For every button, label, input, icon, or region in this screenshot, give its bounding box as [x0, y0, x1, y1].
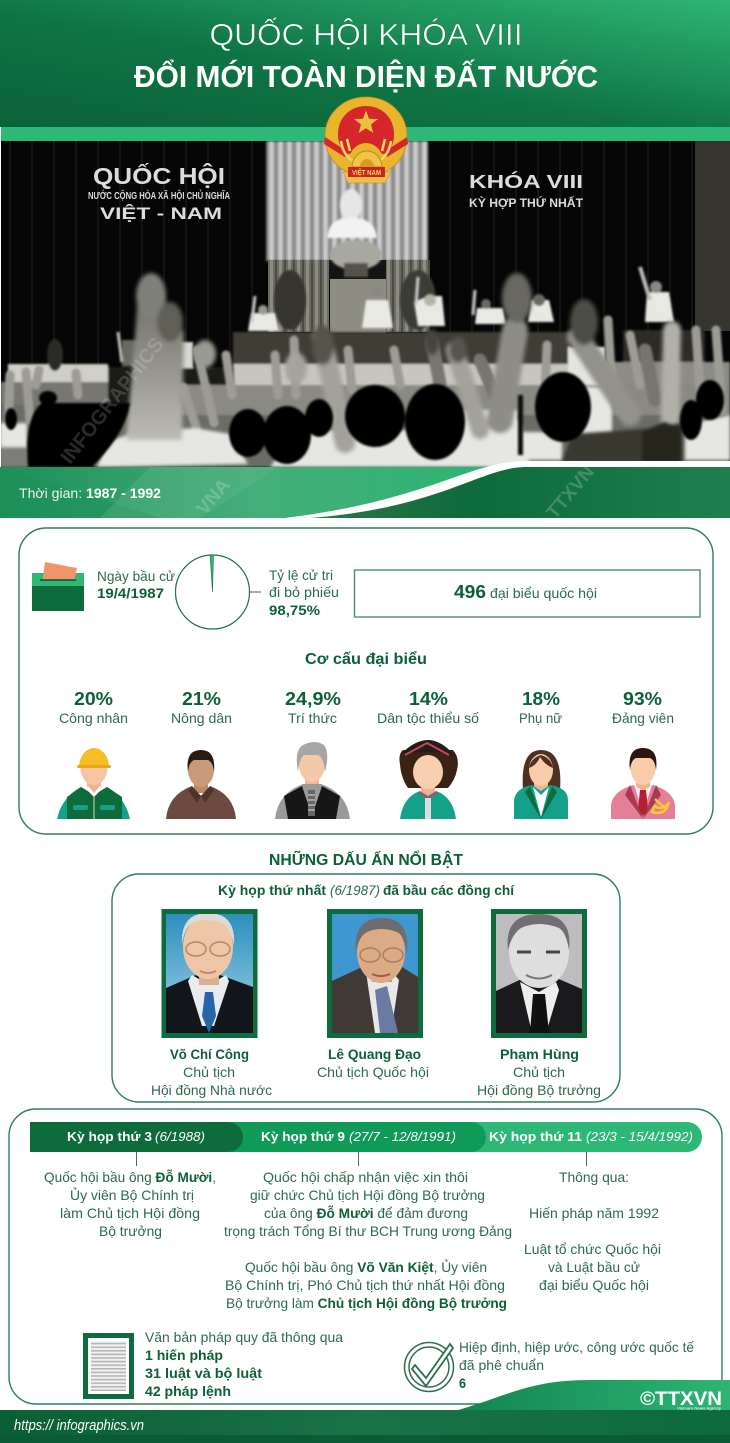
logo: TTXVN: ©TTXVN	[640, 1389, 722, 1410]
title	[134, 16, 598, 94]
stat: women	[519, 689, 562, 726]
panel: later sessions	[9, 1109, 722, 1404]
turnout text: 98,75%	[269, 602, 321, 618]
stat: women: Phụ nữ	[519, 710, 562, 726]
icon: ethnic minority woman	[399, 740, 458, 819]
election date: 19/4/1987	[97, 585, 164, 601]
title: ĐỔI MỚI TOÀN DIỆN ĐẤT NƯỚC	[134, 58, 598, 94]
delegates count box: 496	[454, 582, 486, 602]
stat: ethnic minorities: Dân tộc thiểu số	[377, 710, 479, 726]
bust and flowers	[274, 189, 436, 330]
icon: woman	[514, 750, 568, 819]
icon: intellectual	[275, 742, 350, 819]
session 3 label: Kỳ họp thứ 3	[67, 1129, 152, 1144]
emblem red field	[338, 106, 394, 154]
raised hands	[8, 320, 722, 430]
text: legal documents: 42 pháp lệnh	[145, 1383, 231, 1399]
session 3 label: (6/1988)	[155, 1129, 205, 1144]
header banner	[0, 0, 730, 141]
official: Le Quang Dao	[317, 1046, 429, 1080]
icon: worker	[57, 748, 130, 819]
session 11 label: (23/3 - 15/4/1992)	[586, 1129, 693, 1144]
emblem star	[354, 110, 378, 133]
time banner	[0, 461, 730, 523]
wall sign left: VIỆT - NAM	[100, 204, 222, 223]
delegates count box: đại biểu quốc hội	[490, 585, 597, 601]
portrait: Vo Chi Cong	[162, 909, 258, 1038]
emblem side ribbons	[324, 137, 408, 157]
text: session 9: Quốc hội bầu ông Võ Văn Kiệt, Ủy viên	[245, 1258, 487, 1275]
text: treaties: Hiệp định, hiệp ước, công ước quốc tế	[459, 1339, 694, 1355]
official: Pham Hung	[477, 1046, 601, 1098]
stat: party members	[612, 689, 674, 726]
portrait: Pham Hung	[491, 909, 587, 1038]
national emblem	[324, 97, 408, 183]
wall sign left	[88, 162, 230, 223]
stat: intellectuals	[285, 689, 341, 726]
text: session 3: Bộ trưởng	[99, 1223, 162, 1239]
stat: intellectuals: 24,9%	[285, 689, 341, 709]
text: session 3	[44, 1169, 216, 1239]
banner watermark: VNA	[193, 475, 235, 519]
session 9 label: (27/7 - 12/8/1991)	[349, 1129, 456, 1144]
title: QUỐC HỘI KHÓA VIII	[210, 16, 522, 52]
text: session 9: Quốc hội chấp nhận việc xin thôi	[263, 1169, 468, 1185]
session 11 label	[489, 1129, 693, 1144]
text: treaties: đã phê chuẩn	[459, 1357, 544, 1373]
turnout text: Tỷ lệ cử tri	[269, 567, 333, 583]
stat: party members: 93%	[623, 689, 662, 709]
wall sign right: KHÓA VIII	[469, 171, 583, 192]
official: Le Quang Dao: Chủ tịch Quốc hội	[317, 1064, 429, 1080]
official: Pham Hung: Chủ tịch	[513, 1064, 565, 1080]
icon: legal document	[83, 1333, 134, 1399]
heading: delegate structure: Cơ cấu đại biểu	[305, 650, 427, 668]
text: session 9: trọng trách Tổng Bí thư BCH Trung ương Đảng	[224, 1223, 512, 1239]
official: Vo Chi Cong	[151, 1046, 272, 1098]
time text: Thời gian: 1987 - 1992	[19, 485, 161, 501]
turnout text	[269, 567, 339, 618]
dark sleeves	[562, 422, 682, 463]
text: session 11: Hiến pháp năm 1992	[529, 1205, 659, 1221]
emblem gold body	[325, 97, 407, 172]
stat: farmers: 21%	[182, 689, 221, 709]
text: session 11: đại biểu Quốc hội	[539, 1277, 649, 1293]
wall sign left: NƯỚC CỘNG HÒA XÃ HỘI CHỦ NGHĨA	[88, 189, 230, 202]
footer	[0, 1380, 730, 1443]
icon: ballot box	[32, 562, 84, 611]
session 11 label: Kỳ họp thứ 11	[489, 1129, 582, 1144]
presidium table and floor	[0, 330, 730, 467]
text: session 3: làm Chủ tịch Hội đồng	[60, 1205, 200, 1221]
session heading: (6/1987)	[330, 882, 380, 898]
text: treaties: 6	[459, 1375, 466, 1391]
text: legal documents: 1 hiến pháp	[145, 1347, 223, 1363]
text: session 11: Luật tổ chức Quốc hội	[524, 1241, 661, 1257]
text: legal documents: Văn bản pháp quy đã thông qua	[145, 1329, 343, 1345]
text: session 3: Ủy viên Bộ Chính trị	[70, 1186, 194, 1203]
icon: party member	[611, 748, 675, 819]
photo: national assembly voting	[0, 141, 730, 468]
turnout text: đi bỏ phiếu	[269, 584, 339, 600]
text: session 11	[524, 1169, 661, 1293]
session 3 label	[67, 1129, 205, 1144]
portrait: Le Quang Dao	[327, 909, 423, 1038]
session heading: đã bầu các đồng chí	[383, 882, 515, 898]
stat: women: 18%	[522, 689, 560, 709]
session heading: Kỳ họp thứ nhất	[218, 882, 326, 898]
stage delegates	[118, 267, 674, 362]
official: Vo Chi Cong: Võ Chí Công	[170, 1046, 249, 1062]
session 9 label	[261, 1129, 456, 1144]
election date	[97, 568, 175, 601]
official: Le Quang Dao: Lê Quang Đạo	[328, 1046, 421, 1062]
shirts	[0, 387, 730, 467]
text: treaties	[459, 1339, 694, 1391]
emblem wheat	[341, 139, 391, 161]
session heading	[218, 882, 515, 898]
heading: highlights: NHỮNG DẤU ẤN NỔI BẬT	[269, 849, 463, 869]
icon: farmer	[166, 750, 236, 819]
session 9 label: Kỳ họp thứ 9	[261, 1129, 345, 1144]
stat: intellectuals: Trí thức	[288, 710, 337, 726]
text: session 9: giữ chức Chủ tịch Hội đồng Bộ trưởng	[250, 1187, 485, 1203]
source url: https:// infographics.vn	[14, 1417, 144, 1434]
text: session 9: Bộ Chính trị, Phó Chủ tịch thứ nhất Hội đồng	[225, 1277, 505, 1293]
stat: workers: Công nhân	[59, 710, 128, 726]
wall sign right	[469, 171, 584, 210]
stat: workers: 20%	[74, 689, 113, 709]
wall sign right: KỲ HỢP THỨ NHẤT	[469, 195, 584, 210]
pie chart: turnout	[176, 555, 261, 629]
election date: Ngày bầu cử	[97, 568, 175, 584]
time banner: TTXVN	[543, 462, 599, 523]
panel: first session	[112, 874, 620, 1102]
emblem gear	[352, 151, 382, 167]
panel: election and delegate structure	[19, 528, 713, 834]
stat: farmers: Nông dân	[171, 710, 232, 726]
timeline bar	[30, 1122, 702, 1152]
hammer and sickle	[652, 799, 669, 813]
icon: approval check	[404, 1342, 454, 1392]
stat: workers	[59, 689, 128, 726]
text: session 9: của ông Đỗ Mười để đảm đương	[264, 1205, 468, 1221]
text: legal documents: 31 luật và bộ luật	[145, 1365, 262, 1381]
national emblem: VIỆT NAM	[352, 168, 381, 177]
stat: ethnic minorities: 14%	[409, 689, 448, 709]
photo watermark: INFOGRAPHICS	[57, 334, 168, 468]
emblem ribbon	[343, 172, 391, 183]
text: session 11: Thông qua:	[559, 1169, 629, 1185]
text: session 9: Bộ trưởng làm Chủ tịch Hội đồng Bộ trưởng	[226, 1295, 507, 1311]
text: session 9	[224, 1169, 512, 1311]
official: Vo Chi Cong: Hội đồng Nhà nước	[151, 1082, 272, 1098]
text: session 11: và Luật bầu cử	[548, 1259, 640, 1275]
text: legal documents	[145, 1329, 343, 1399]
stat: farmers	[171, 689, 232, 726]
text: session 3: Quốc hội bầu ông Đỗ Mười,	[44, 1169, 216, 1185]
official: Pham Hung: Hội đồng Bộ trưởng	[477, 1082, 601, 1098]
stat: ethnic minorities	[377, 689, 479, 726]
official: Vo Chi Cong: Chủ tịch	[183, 1064, 235, 1080]
delegates count box	[354, 570, 700, 617]
logo: TTXVN: Vietnam News Agency	[677, 1406, 721, 1410]
stat: party members: Đảng viên	[612, 710, 674, 726]
heads	[5, 372, 724, 467]
official: Pham Hung: Phạm Hùng	[500, 1046, 579, 1062]
big foreground arms	[126, 273, 672, 443]
wall sign left: QUỐC HỘI	[93, 162, 225, 189]
